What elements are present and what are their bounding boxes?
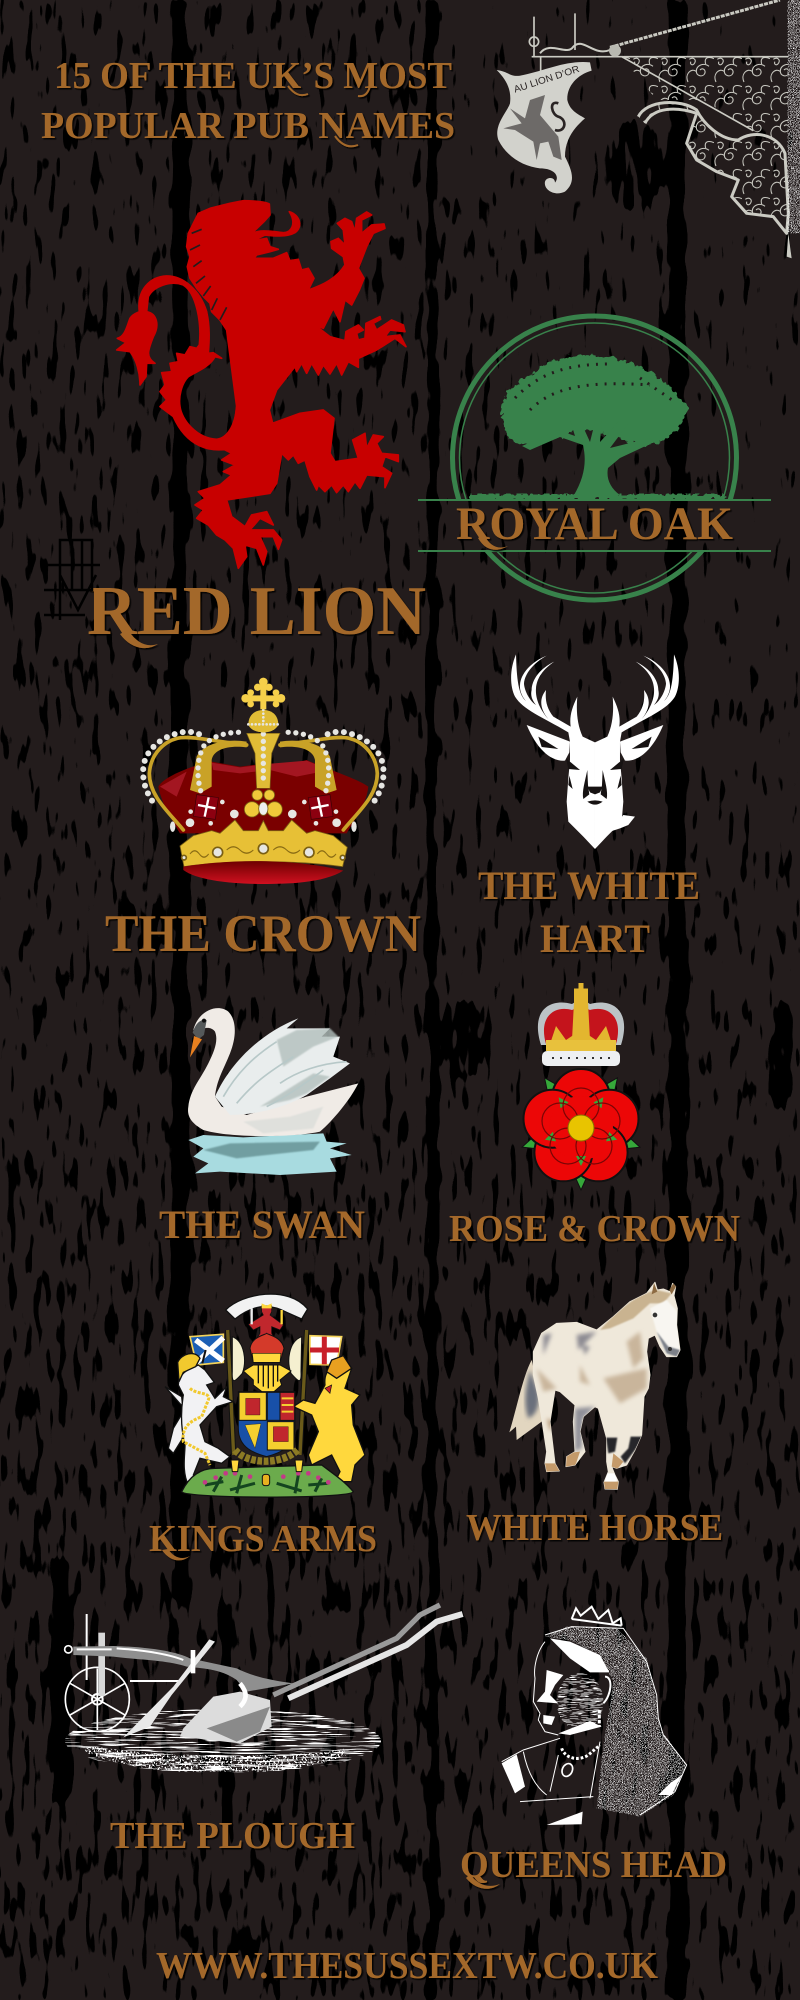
cross badges bbox=[194, 795, 333, 819]
heading: Rose & Crown: ROSE & CROWN bbox=[449, 1208, 740, 1250]
inner arches bbox=[190, 741, 247, 793]
veil texture bbox=[545, 1627, 687, 1817]
unicorn supporter bbox=[165, 1350, 233, 1487]
handles bbox=[273, 1605, 440, 1695]
thistles bbox=[203, 1460, 331, 1493]
mask, eye and beak bbox=[193, 1020, 207, 1039]
illustration: hanging pub sign and iron bracket: AU LION D’OR bbox=[513, 64, 581, 96]
cross bbox=[247, 685, 279, 709]
heading: Kings Arms: KINGS ARMS bbox=[149, 1518, 377, 1560]
beam bbox=[73, 1646, 293, 1692]
heading: The Swan: THE SWAN bbox=[159, 1202, 365, 1247]
ear bbox=[603, 1677, 610, 1703]
pearl studs bbox=[170, 800, 357, 832]
left half bbox=[511, 654, 595, 849]
bow ornament bbox=[244, 790, 282, 817]
rose outer petals bbox=[524, 1069, 638, 1181]
tuft on beard bbox=[610, 815, 635, 832]
tail bbox=[509, 1360, 542, 1440]
wheel bbox=[65, 1667, 129, 1731]
icon: white horse bbox=[509, 1282, 680, 1492]
icon: royal crown bbox=[143, 678, 384, 884]
heading: The White Hart: THE WHITE bbox=[478, 863, 700, 908]
earring bbox=[595, 1710, 604, 1727]
outer arches bbox=[143, 732, 384, 830]
coulter blade bbox=[123, 1639, 215, 1737]
centre stem bbox=[247, 733, 280, 788]
band rules bbox=[418, 500, 771, 551]
crown bbox=[572, 1607, 622, 1626]
veil highlight bbox=[658, 1775, 682, 1795]
right half mirrored bbox=[595, 654, 679, 849]
icon: swan bbox=[188, 1008, 358, 1175]
water bbox=[188, 1133, 352, 1175]
cheek hatching bbox=[557, 1673, 603, 1730]
brow and nose highlights bbox=[537, 1670, 563, 1703]
crest figure bbox=[248, 1306, 283, 1342]
veil outline bbox=[545, 1627, 687, 1815]
hair bbox=[550, 1638, 609, 1672]
rose seed head bbox=[568, 1115, 594, 1141]
icon: engraved plough bbox=[65, 1605, 463, 1773]
socks bbox=[606, 1437, 643, 1463]
neck highlight bbox=[558, 1721, 602, 1735]
gold band bbox=[180, 820, 347, 867]
lion supporter bbox=[293, 1356, 365, 1482]
flags bbox=[190, 1334, 223, 1365]
icon: red lion rampant bbox=[117, 201, 406, 568]
mane bbox=[600, 1290, 672, 1330]
crown and helm bbox=[250, 1333, 284, 1362]
body bbox=[533, 1282, 680, 1489]
illustration: hanging pub sign and iron bracket bbox=[497, 0, 800, 258]
blaze bbox=[650, 1300, 680, 1355]
rose inner sepals bbox=[543, 1094, 619, 1166]
mantling bbox=[232, 1337, 302, 1381]
ground bbox=[182, 1465, 353, 1497]
furrow shadow bbox=[65, 1709, 381, 1773]
orb bbox=[248, 710, 278, 732]
neckline and shoulders bbox=[502, 1738, 600, 1802]
band jewels and knots bbox=[182, 844, 345, 860]
necklace bbox=[562, 1745, 600, 1758]
profile bbox=[533, 1642, 558, 1735]
bodice tip bbox=[547, 1812, 583, 1825]
icon: small crown over Tudor rose bbox=[519, 983, 643, 1190]
wing bbox=[215, 1018, 350, 1115]
hooves bbox=[545, 1452, 623, 1492]
heading: Red Lion: RED LION bbox=[87, 573, 426, 650]
heading: The White Hart bbox=[478, 863, 700, 961]
chain collar bbox=[235, 1450, 298, 1461]
sign shield bbox=[497, 62, 592, 193]
velvet cap bbox=[158, 760, 368, 833]
heading: The White Hart: HART bbox=[540, 916, 650, 961]
title bbox=[41, 55, 455, 147]
share and mouldboard bbox=[180, 1692, 272, 1743]
rose inner petals bbox=[542, 1088, 620, 1164]
feather shading bbox=[260, 1028, 338, 1107]
rose sepals bbox=[519, 1073, 643, 1190]
title: 15 OF THE UK’S MOST bbox=[54, 55, 452, 97]
icon: faint barrel mark bbox=[44, 540, 100, 620]
small crown bbox=[538, 983, 624, 1066]
title: POPULAR PUB NAMES bbox=[41, 105, 455, 147]
icon: engraved Queen Victoria portrait bbox=[502, 1607, 687, 1825]
oak tree bbox=[470, 355, 724, 500]
banner poles bbox=[228, 1330, 307, 1455]
icon: royal coat of arms bbox=[165, 1294, 365, 1497]
logo: Royal Oak tree roundel bbox=[418, 316, 771, 600]
icon: white hart stag head bbox=[511, 654, 679, 849]
heading: The Crown: THE CROWN bbox=[105, 905, 421, 963]
body shading bbox=[243, 1107, 323, 1133]
heading: The Plough: THE PLOUGH bbox=[110, 1815, 355, 1857]
heading: Queens Head: QUEENS HEAD bbox=[460, 1844, 727, 1886]
roundel rings bbox=[452, 316, 736, 600]
ribbon motto bbox=[226, 1294, 308, 1319]
label: ROYAL OAK bbox=[456, 498, 733, 550]
shield bbox=[238, 1392, 295, 1457]
sleeve frill bbox=[502, 1754, 525, 1793]
face details bbox=[538, 737, 652, 805]
website address: WWW.THESUSSEXTW.CO.UK bbox=[156, 1945, 658, 1987]
watercolour shading bbox=[537, 1290, 680, 1492]
neck and body bbox=[188, 1008, 358, 1136]
heading: White Horse: WHITE HORSE bbox=[466, 1507, 723, 1549]
